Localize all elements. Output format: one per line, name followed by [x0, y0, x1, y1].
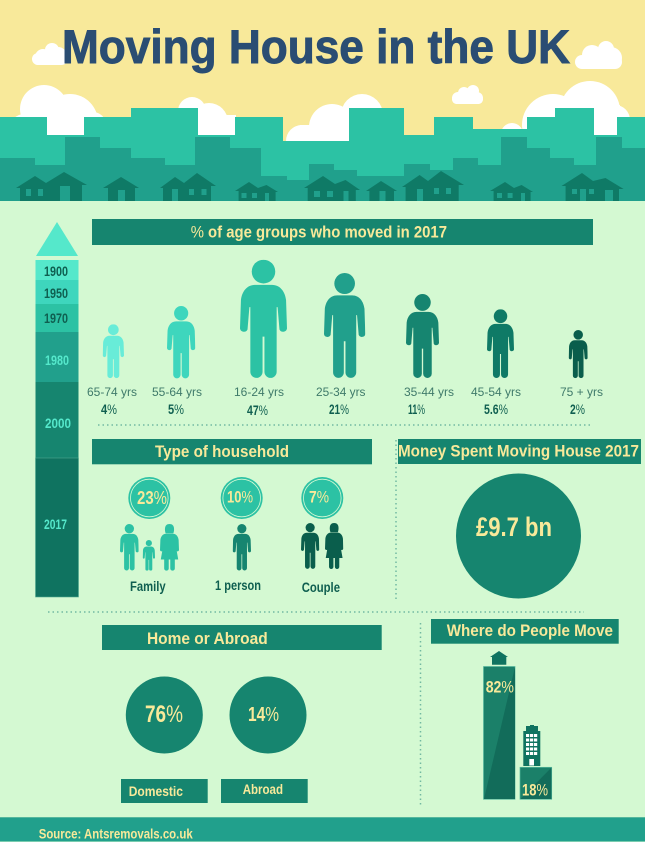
- footer band: Source: Antsremovals.co.uk: [39, 826, 193, 842]
- person 35-44: 35-44 yrs: [404, 385, 454, 399]
- person 25-34: [316, 273, 366, 417]
- heading: home or abroad: [102, 625, 382, 650]
- money circle: £9.7 bn: [476, 512, 552, 542]
- timeline 1950: [36, 280, 78, 304]
- person 65-74: 65-74 yrs: [87, 385, 137, 399]
- person 35-44: [404, 294, 454, 417]
- person 16-24: 47%: [247, 403, 268, 418]
- ground background: [0, 201, 645, 842]
- household: 1 person: [215, 477, 263, 593]
- timeline 1950: 1950: [44, 286, 68, 301]
- circle: 76%: 76%: [145, 701, 183, 728]
- heading: where do people move: [431, 619, 619, 644]
- person 35-44: 11%: [408, 402, 425, 417]
- person 55-64: 55-64 yrs: [152, 385, 202, 399]
- person 45-54: 45-54 yrs: [471, 385, 521, 399]
- footer band: [0, 817, 645, 842]
- label: abroad: Abroad: [243, 782, 283, 797]
- badge 7%: 7%: [309, 488, 329, 506]
- icon: tower block: [523, 725, 540, 766]
- household: couple: Couple: [302, 580, 340, 595]
- money circle: [456, 474, 581, 598]
- timeline 1970: 1970: [44, 311, 68, 326]
- circle: 14%: 14%: [248, 704, 279, 726]
- houses row: [16, 171, 624, 201]
- person 55-64: [152, 306, 202, 417]
- household: 1 person: 1 person: [215, 578, 261, 593]
- timeline 1980: [36, 332, 78, 382]
- bar: 82% with house: [484, 651, 515, 799]
- household: family: [120, 477, 179, 594]
- chart: age groups pictogram: [87, 260, 603, 418]
- timeline 1900: 1900: [44, 264, 68, 279]
- person 65-74: 4%: [101, 402, 117, 417]
- timeline 2017: [36, 458, 78, 597]
- person 45-54: 5.6%: [484, 402, 508, 417]
- heading: type of household: Type of household: [155, 442, 289, 461]
- clouds: [10, 41, 630, 157]
- household: family: Family: [130, 579, 166, 594]
- timeline 2017: 2017: [44, 517, 67, 532]
- heading: type of household: [92, 439, 372, 464]
- timeline 1900: [36, 260, 78, 280]
- heading: where do people move: Where do People Move: [447, 621, 613, 640]
- household: couple: [301, 477, 343, 595]
- bar: 18% with tower: [520, 725, 552, 799]
- label: domestic: [121, 779, 208, 803]
- timeline 2000: [36, 382, 78, 458]
- person 16-24: 16-24 yrs: [234, 385, 284, 399]
- person 25-34: 21%: [329, 402, 349, 417]
- person 16-24: [234, 260, 287, 418]
- person 75+: [560, 330, 603, 417]
- family icons: [120, 524, 179, 571]
- person 55-64: 5%: [168, 402, 184, 417]
- badge 23%: 23%: [137, 488, 167, 508]
- bar: 82% with house: 82%: [486, 677, 514, 696]
- label: abroad: [221, 779, 308, 803]
- sky background: [0, 0, 645, 201]
- circle: 14%: [230, 676, 306, 754]
- bar: 18% with tower: 18%: [522, 780, 548, 799]
- person 75+: 75 + yrs: [560, 385, 603, 399]
- person 75+: 2%: [570, 402, 585, 417]
- timeline arrow head: [36, 222, 78, 256]
- single person icon: [233, 524, 251, 571]
- timeline 1980: 1980: [45, 353, 69, 368]
- heading: age groups: [92, 219, 593, 245]
- heading: home or abroad: Home or Abroad: [147, 630, 268, 648]
- timeline column: [36, 222, 78, 597]
- label: domestic: Domestic: [129, 784, 183, 799]
- person 25-34: 25-34 yrs: [316, 385, 366, 399]
- skyline: back buildings: [0, 137, 645, 201]
- timeline 2000: 2000: [45, 416, 71, 431]
- timeline 1970: [36, 304, 78, 332]
- skyline: front buildings: [0, 108, 645, 201]
- icon: house: [490, 651, 508, 665]
- circle: 76%: [126, 676, 203, 754]
- title: Moving House in the UK: [62, 20, 570, 73]
- badge 10%: 10%: [227, 488, 253, 506]
- couple icons: [301, 523, 343, 569]
- heading: age groups: % of age groups who moved in 2017: [191, 224, 447, 242]
- person 45-54: [471, 309, 521, 417]
- person 65-74: [87, 324, 137, 417]
